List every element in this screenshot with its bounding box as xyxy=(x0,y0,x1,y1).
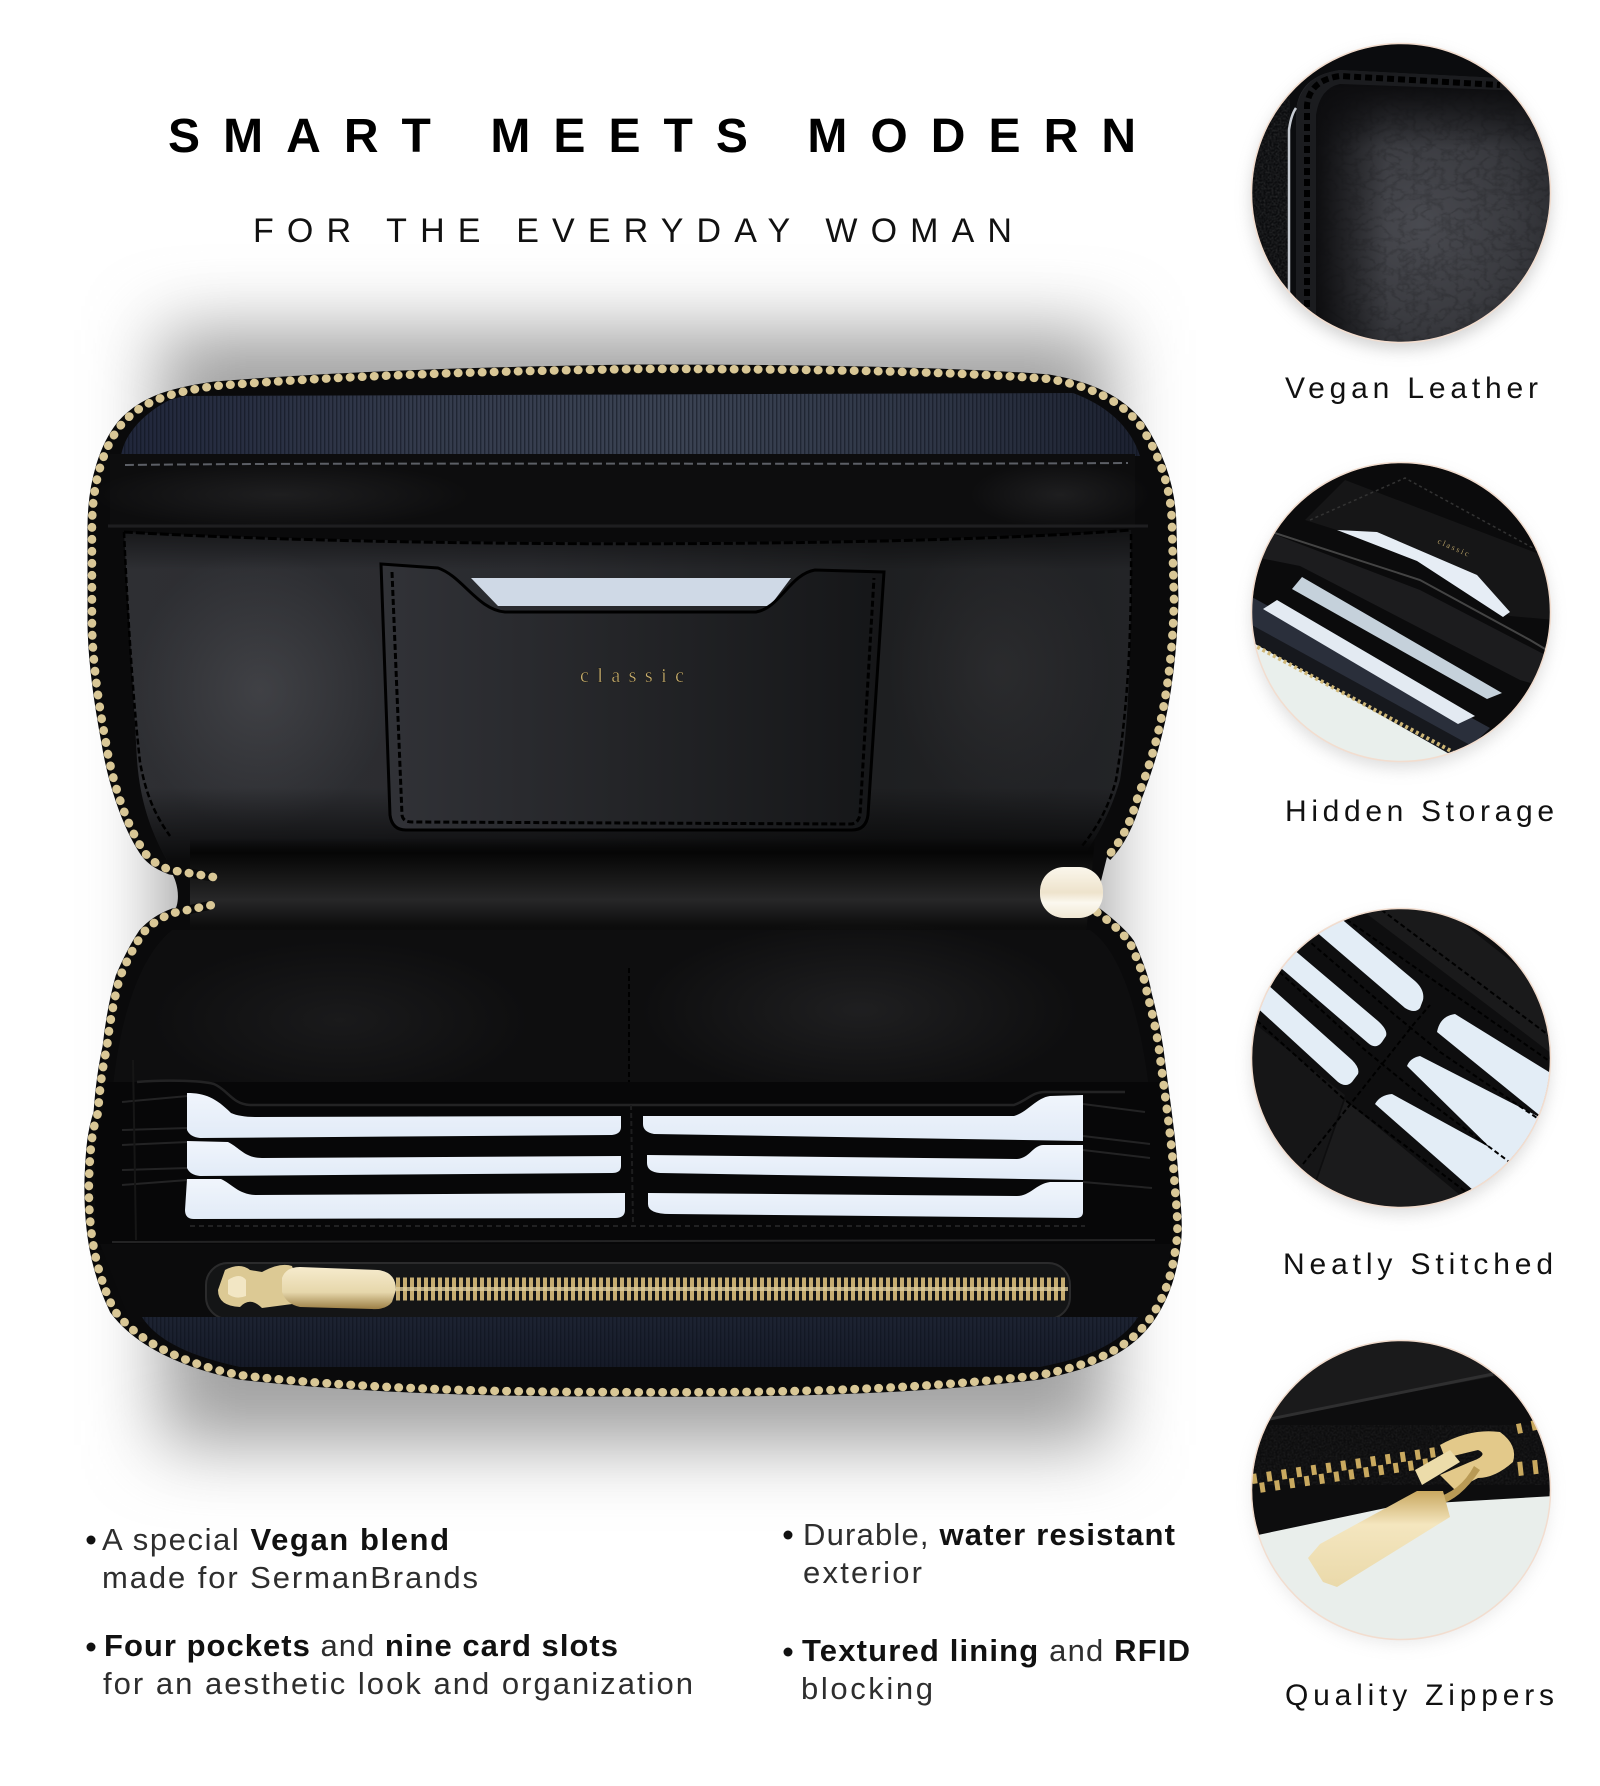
bullet: water resistant xyxy=(784,1517,1175,1590)
right cards xyxy=(643,1095,1083,1218)
subtitle: FOR THE EVERYDAY WOMAN xyxy=(253,212,1012,250)
wallet drop shadow xyxy=(160,330,1110,1445)
circle photo xyxy=(1252,909,1550,1207)
circle photo xyxy=(1250,460,1555,770)
hinge snap right xyxy=(1040,867,1103,918)
bullet: pockets and slots: for an aesthetic look and organization xyxy=(103,1666,693,1701)
bullet: lining and rfid: blocking xyxy=(801,1671,933,1706)
zipper slider xyxy=(218,1265,396,1309)
circle photo xyxy=(1250,40,1557,345)
circle rim xyxy=(1252,462,1550,762)
bullet: vegan blend: A special Vegan blend xyxy=(102,1522,449,1557)
circle shadow xyxy=(1252,916,1550,1214)
bullet: pockets and slots xyxy=(86,1628,693,1701)
left cards xyxy=(185,1093,625,1219)
panel: quality zippers xyxy=(1250,1338,1555,1644)
panel: neatly stitched xyxy=(1246,908,1556,1220)
bullet: vegan blend xyxy=(86,1522,478,1595)
label: neatly stitched: Neatly Stitched xyxy=(1283,1248,1553,1281)
brand stamp: classic xyxy=(580,665,684,687)
panel: hidden storage xyxy=(1250,460,1555,770)
lower slot stitching xyxy=(112,1226,1155,1242)
bullet: lining and rfid xyxy=(784,1633,1190,1706)
lower back pocket xyxy=(112,920,1150,1108)
card divider stitching xyxy=(631,1105,633,1222)
top lining band xyxy=(121,393,1140,456)
bullet: water resistant: Durable, water resistant xyxy=(803,1517,1175,1552)
large back pocket xyxy=(124,530,1131,860)
circle shadow xyxy=(1252,51,1550,349)
circle photo xyxy=(1252,1341,1550,1587)
circle rim xyxy=(1252,1340,1550,1640)
bullet: vegan blend: made for SermanBrands xyxy=(102,1560,478,1595)
zipper pull xyxy=(1308,1431,1514,1587)
bottom lining band xyxy=(142,1317,1138,1367)
wallet photo xyxy=(89,369,1185,1392)
stitched cards xyxy=(1260,920,1549,1189)
title: SMART MEETS MODERN xyxy=(168,110,1136,163)
hinge spine xyxy=(190,838,1095,945)
circle rim xyxy=(1252,44,1550,342)
brand stamp: classic xyxy=(1436,537,1472,559)
card holder pocket xyxy=(381,564,884,830)
bullet list: left column xyxy=(86,1522,693,1701)
upper leather strip xyxy=(90,454,1150,529)
card slot leather block xyxy=(248,1082,967,1094)
zipper pocket panel xyxy=(205,1262,1071,1317)
left slot lines xyxy=(122,1060,1152,1240)
bullet: pockets and slots: Four pockets and nine card slots xyxy=(104,1628,618,1663)
bullet: water resistant: exterior xyxy=(803,1555,922,1590)
label: vegan leather: Vegan Leather xyxy=(1285,372,1538,405)
zipper teeth xyxy=(1252,1421,1555,1489)
bullet: lining and rfid: Textured lining and RFID xyxy=(802,1633,1190,1668)
circle shadow xyxy=(1252,1346,1550,1644)
pocket flap edge xyxy=(137,1081,1125,1105)
bullet list: right column xyxy=(784,1517,1190,1706)
circle rim xyxy=(1252,908,1550,1208)
panel: vegan leather xyxy=(1250,40,1557,349)
inner zipper teeth xyxy=(396,1278,1068,1300)
perimeter zipper xyxy=(89,369,1177,1392)
wallet body xyxy=(89,369,1177,1392)
label: quality zippers: Quality Zippers xyxy=(1285,1679,1554,1712)
label: hidden storage: Hidden Storage xyxy=(1285,795,1554,828)
white card in top slot xyxy=(471,578,791,606)
circle shadow xyxy=(1252,470,1550,768)
